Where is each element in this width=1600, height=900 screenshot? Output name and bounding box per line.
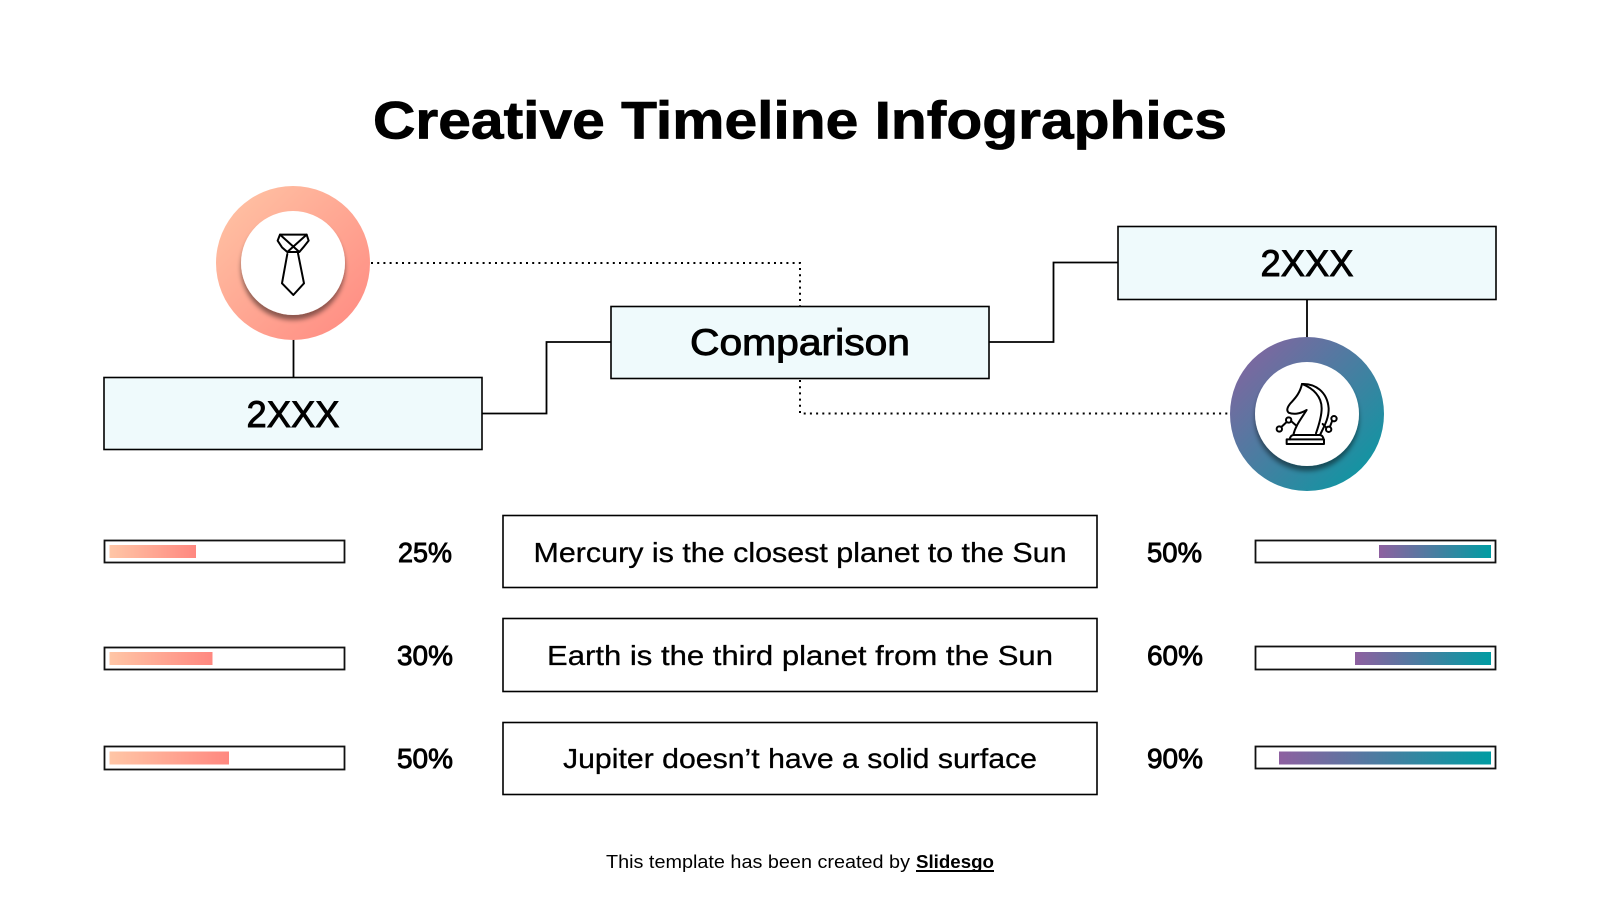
icon: necktie xyxy=(278,235,309,295)
label 60%: 60% xyxy=(1147,640,1203,671)
label 25%: 25% xyxy=(398,537,452,568)
text box: Mercury xyxy=(503,516,1097,588)
connector: comparison box to right box xyxy=(989,262,1118,342)
text box: Jupiter xyxy=(503,722,1097,794)
box: left year xyxy=(104,378,482,450)
box: right year: 2XXX xyxy=(1260,243,1354,284)
left progress bar 50% xyxy=(104,746,344,770)
left progress bar 30% xyxy=(104,648,344,670)
text box: Mercury: Mercury is the closest planet to the Sun xyxy=(534,537,1066,568)
box: comparison xyxy=(611,306,989,378)
dotted connector: comparison box to second ring xyxy=(800,380,1230,414)
right progress bar 90% xyxy=(1256,746,1496,768)
box: left year: 2XXX xyxy=(246,394,340,435)
footer credit: This template has been created by xyxy=(606,851,911,872)
left progress bar 25% xyxy=(104,540,344,562)
icon: chess knight xyxy=(1277,384,1337,444)
dotted connector: first ring to comparison box xyxy=(371,263,800,306)
ring icon: chess knight xyxy=(1230,337,1384,491)
text box: Jupiter: Jupiter doesn’t have a solid surface xyxy=(563,743,1037,774)
ring icon: necktie xyxy=(216,186,370,340)
footer credit: Slidesgo xyxy=(916,851,994,872)
text box: Earth xyxy=(503,618,1097,692)
box: right year xyxy=(1118,226,1496,300)
connector: first ring to left box xyxy=(292,338,294,377)
label 90%: 90% xyxy=(1147,743,1203,774)
label 50% left: 50% xyxy=(397,743,453,774)
right progress bar 60% xyxy=(1256,646,1496,670)
text box: Earth: Earth is the third planet from the Sun xyxy=(547,640,1053,671)
label 50% right: 50% xyxy=(1147,537,1202,568)
title: Creative Timeline Infographics xyxy=(373,92,1227,150)
label 30%: 30% xyxy=(397,640,453,671)
box: comparison: Comparison xyxy=(690,322,910,363)
connector: left box to comparison box xyxy=(482,342,611,414)
right progress bar 50% xyxy=(1256,540,1496,562)
connector: right box to second ring xyxy=(1306,299,1308,339)
